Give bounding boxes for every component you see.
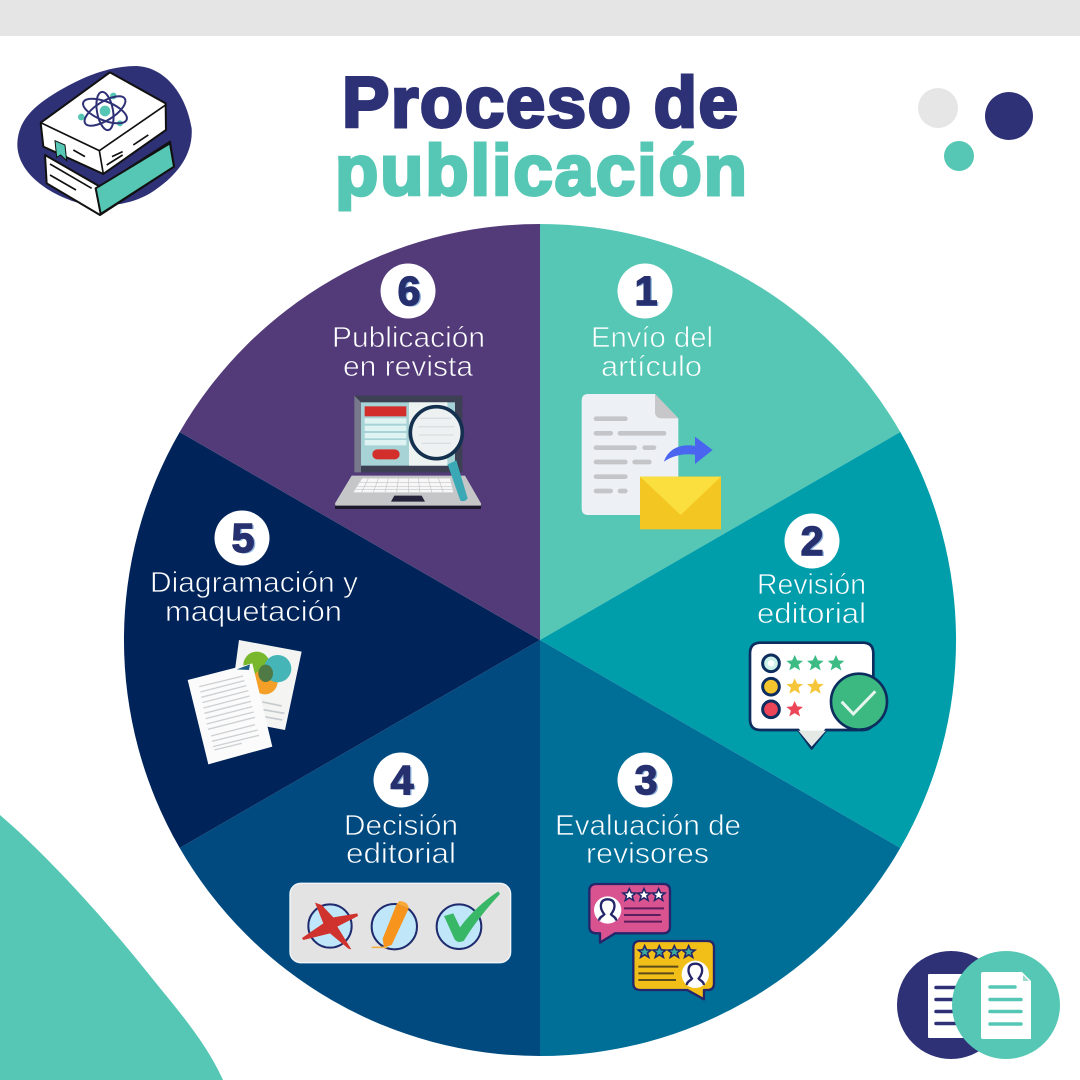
step 6: Publicación en revista: Publicación [332,322,485,354]
step 2: Revisión editorial: editorial [757,598,866,630]
icon: overlapping document circles [897,951,1060,1059]
step 6: Publicación en revista [332,264,485,383]
step 3: Evaluación de revisores: revisores [586,838,709,870]
step 1: Envío del artículo: 1 [637,269,659,315]
icon: decision panel [290,883,511,963]
icon: reviewer speech bubbles [589,884,714,999]
step 2: Revisión editorial: 2 [803,519,825,565]
icon: layout pages [188,640,302,764]
step 5: Diagramación y maquetación: 5 [234,516,256,562]
step 1: Envío del artículo: 1 [635,268,657,314]
step 2: Revisión editorial: Revisión [757,569,866,601]
step 3: Evaluación de revisores: 3 [635,757,657,803]
step 1: Envío del artículo: artículo [601,351,702,383]
icon: rating speech bubble with check [750,643,887,748]
step 1: Envío del artículo [591,264,713,383]
step 2: Revisión editorial: 2 [801,518,823,564]
step 5: Diagramación y maquetación: Diagramación y [150,567,359,599]
pie chart: six process steps [124,224,956,1056]
top grey band [0,0,1080,36]
icon: laptop with magnifying glass [335,396,481,509]
step 4: Decisión editorial: Decisión [344,810,458,842]
step 6: Publicación en revista: 6 [398,268,420,314]
step 6: Publicación en revista: en revista [343,351,474,383]
step 4: Decisión editorial [344,752,458,870]
step 3: Evaluación de revisores: Evaluación de [555,810,741,842]
step 4: Decisión editorial: 4 [391,757,414,803]
title [335,64,747,211]
step 4: Decisión editorial: editorial [346,838,456,870]
decorative dots [918,88,1033,171]
step 6: Publicación en revista: 6 [400,269,422,315]
step 1: Envío del artículo: Envío del [591,322,713,354]
step 5: Diagramación y maquetación: maquetación [165,596,342,628]
icon: document and envelope [582,394,721,529]
step 4: Decisión editorial: 4 [393,758,416,804]
title: publicación [335,132,747,211]
step 3: Evaluación de revisores [555,752,741,870]
step 5: Diagramación y maquetación [150,510,359,628]
step 3: Evaluación de revisores: 3 [637,758,659,804]
step 5: Diagramación y maquetación: 5 [232,515,254,561]
teal corner shape [0,815,223,1080]
icon: stacked science books [17,66,192,215]
step 2: Revisión editorial [757,514,866,630]
title: Proceso de [342,64,738,143]
